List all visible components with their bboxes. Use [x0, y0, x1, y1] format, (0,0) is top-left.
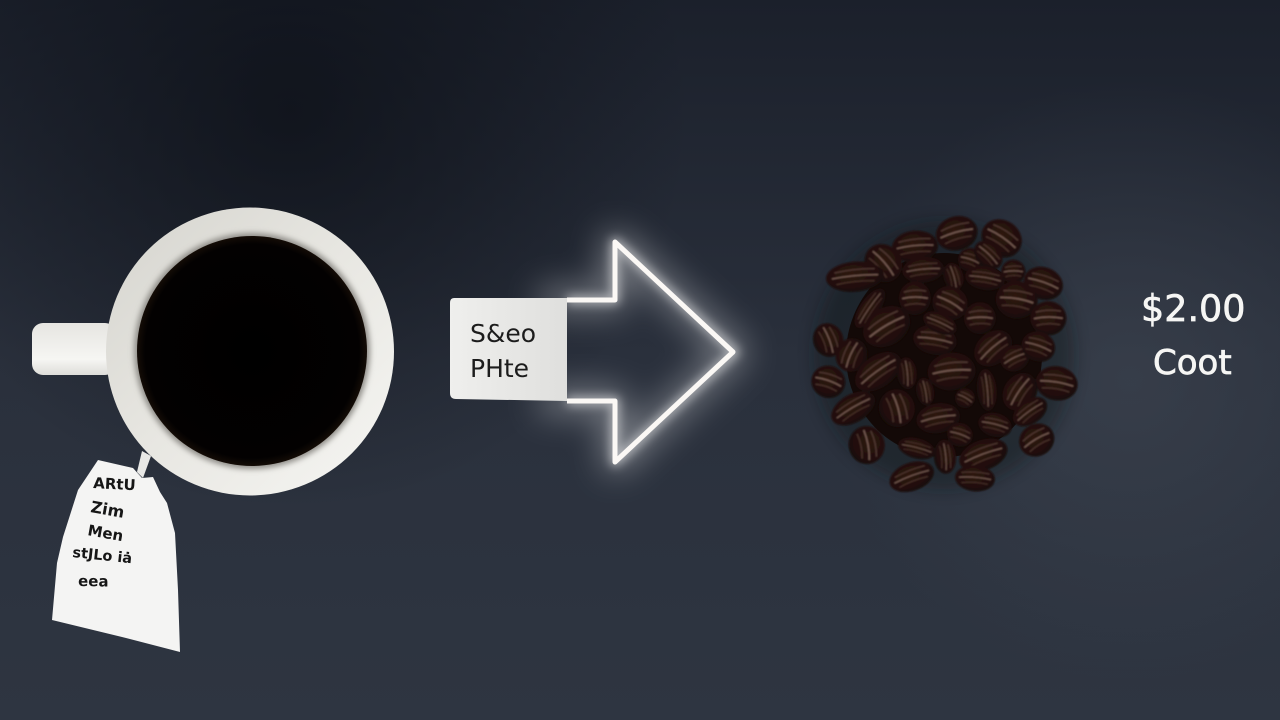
arrow halo — [567, 242, 735, 462]
coffee beans pile — [807, 211, 1080, 498]
mug handle — [32, 323, 116, 375]
arrow label card: S&eo — [470, 319, 536, 348]
tea tag — [52, 451, 180, 652]
glowing arrow — [450, 242, 735, 462]
tag text: Zim — [89, 497, 126, 522]
tag text: ARtU — [93, 474, 136, 494]
pile shadow — [814, 221, 1074, 489]
coffee mug — [32, 208, 394, 496]
tag text: stJLo iȧ — [72, 545, 133, 567]
tag paper — [52, 460, 180, 652]
arrow label card: PHte — [470, 354, 529, 383]
price value: $2.00 — [1141, 287, 1246, 330]
tag string — [137, 451, 151, 478]
tag text: Men — [86, 521, 125, 545]
price label — [1141, 287, 1246, 383]
arrow outline — [567, 242, 733, 462]
arrow glow — [540, 242, 735, 462]
tag text: eea — [78, 572, 109, 591]
tag text — [72, 474, 136, 591]
cost caption: Coot — [1153, 343, 1232, 383]
beans — [807, 211, 1080, 498]
arrow label card — [450, 298, 567, 401]
mug inner wall — [134, 233, 370, 469]
mug rim — [106, 208, 394, 496]
coffee surface — [137, 236, 367, 466]
